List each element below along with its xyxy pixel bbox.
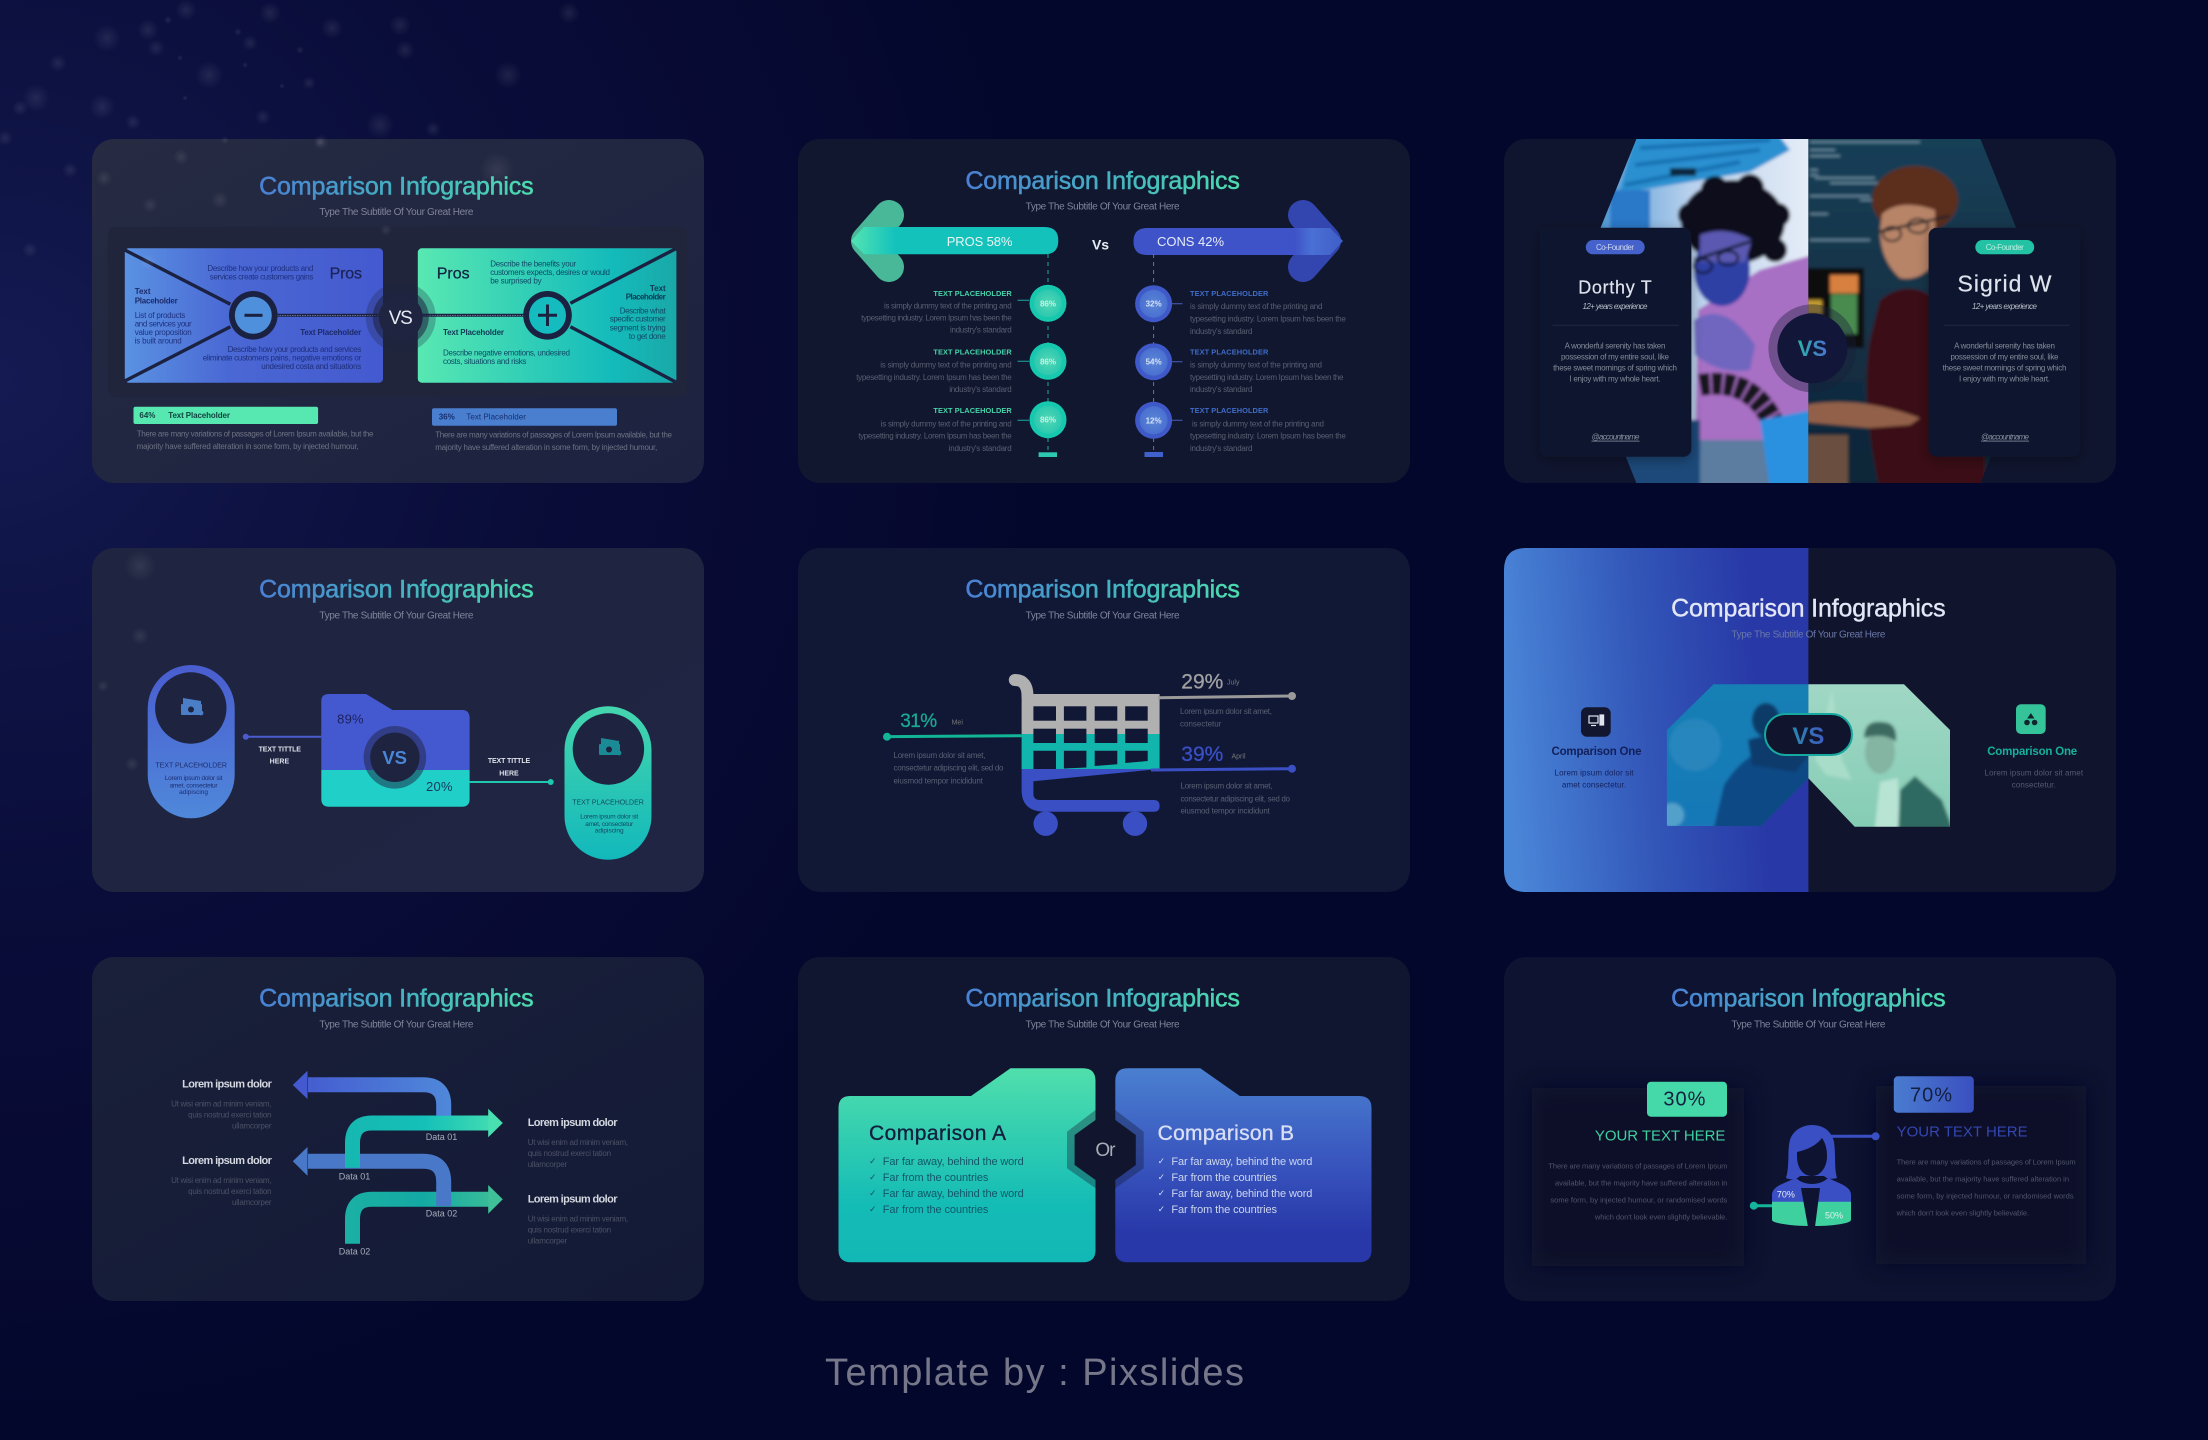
list: cons text: is simply dummy text of the printing and [1190, 302, 1322, 311]
card: blue cons: services create customers gains [210, 272, 313, 281]
text: top right [528, 1117, 628, 1169]
list: pros text: typesetting industry. Lorem Ipsum has been the [858, 432, 1012, 441]
card: green pros: specific customer [610, 315, 666, 324]
list: cons text: industry's standard [1190, 444, 1252, 453]
list: cons text: industry's standard [1190, 327, 1252, 336]
folder: comparison B: Far from the countries [1171, 1172, 1278, 1184]
timeline: pros: 86% [1040, 299, 1056, 308]
pill: right: adipiscing [595, 827, 624, 834]
card: Dorthy T: 12+ years experience [1582, 302, 1648, 311]
folder: comparison B: Far far away, behind the word [1171, 1156, 1312, 1168]
text: lower right [528, 1193, 628, 1245]
shadow cards [1532, 1086, 2086, 1266]
connector: left: HERE [270, 759, 289, 766]
text: left note [137, 430, 374, 451]
folder: comparison A: ✓ [869, 1189, 877, 1199]
icon: three nodes [2024, 713, 2037, 725]
or badge [1067, 1110, 1144, 1188]
bar: 64%: 64% [139, 411, 155, 420]
arrow labels: Data 02 [426, 1209, 457, 1219]
connector: left: TEXT TITTLE [259, 746, 301, 753]
bar: 64% [134, 407, 318, 424]
text: lower left [171, 1155, 273, 1207]
card: blue cons: List of products [135, 311, 185, 320]
connector: right [470, 758, 554, 785]
block: 70%: available, but the majority have suffered alteration in [1897, 1175, 2069, 1184]
card: green pros: to get done [629, 332, 666, 341]
arrow: blue data 01 [293, 1071, 444, 1116]
text: lower left: Lorem ipsum dolor [182, 1155, 273, 1167]
list: pros text: industry's standard [949, 385, 1012, 394]
panel: profile comparison [1504, 130, 2116, 490]
text: top right: ullamcorper [528, 1160, 568, 1169]
list: cons text: is simply dummy text of the printing and [1190, 361, 1322, 370]
arrow labels: Data 01 [426, 1132, 457, 1142]
text: left note: majority have suffered alteration in some form, by injected humour, [137, 442, 359, 451]
card: blue cons: is built around [135, 337, 182, 346]
list: pros text: TEXT PLACEHOLDER [933, 347, 1012, 356]
panel: shopping cart [798, 548, 1410, 892]
subtitle: Type The Subtitle Of Your Great Here [319, 1020, 474, 1031]
card: blue cons: Pros [330, 265, 362, 282]
panel: crossing arrows [92, 957, 704, 1301]
card: Sigrid W: these sweet mornings of spring which [1943, 364, 2066, 373]
list: pros text [856, 289, 1012, 453]
folder: comparison A [838, 1068, 1096, 1262]
callout: 29% July: consectetur [1180, 720, 1222, 729]
list: cons text: is simply dummy text of the printing and [1192, 419, 1324, 428]
card: Sigrid W: A wonderful serenity has taken [1954, 342, 2055, 351]
card: Sigrid W: 12+ years experience [1972, 302, 2038, 311]
list: pros text: industry's standard [950, 326, 1012, 335]
card: Dorthy T: I enjoy with my whole heart. [1570, 375, 1660, 384]
arrow: teal data 02 [352, 1185, 503, 1244]
card: Dorthy T: Dorthy T [1578, 278, 1652, 298]
callout: 31% Mei: consectetur adipiscing elit, sed do [894, 764, 1004, 773]
card: green pros [418, 248, 676, 383]
timeline: cons: 54% [1146, 358, 1162, 367]
card: green pros: segment is trying [610, 323, 666, 332]
folder: 20% [426, 779, 453, 794]
list: pros text: typesetting industry. Lorem Ipsum has been the [856, 373, 1012, 382]
text: top right: Ut wisi enim ad minim veniam, [528, 1138, 628, 1147]
panel: pros cons arrows [798, 139, 1410, 483]
title: Comparison Infographics [259, 172, 534, 200]
arrow: teal data 01 [352, 1109, 503, 1168]
icon: plus circle [523, 291, 572, 340]
icon: person: 70% [1777, 1189, 1795, 1199]
arrow: pros: PROS 58% [947, 234, 1013, 249]
pill: left: TEXT PLACEHOLDER [155, 763, 227, 770]
block: 30%: available, but the majority have suffered alteration in [1555, 1179, 1727, 1188]
list: pros text: industry's standard [949, 444, 1012, 453]
list: pros text: TEXT PLACEHOLDER [933, 406, 1012, 415]
panel: folder vs pills [92, 548, 704, 892]
icon: person [1750, 1125, 1880, 1227]
card: blue cons: and services your [135, 319, 192, 328]
folder: comparison A: ✓ [869, 1173, 877, 1183]
or badge: Or [1095, 1140, 1116, 1161]
callout: 39% April [1151, 743, 1296, 816]
text: right note: majority have suffered alteration in some form, by injected humour, [435, 443, 657, 452]
block: right comparison: consectetur. [2012, 781, 2056, 790]
vs badge: VS [1798, 336, 1827, 361]
card: Dorthy T: possession of my entire soul, like [1561, 353, 1670, 362]
text: right note [435, 431, 673, 452]
photo: right [1808, 684, 1950, 827]
list: cons text: typesetting industry. Lorem Ipsum has been the [1190, 432, 1346, 441]
list: pros text: TEXT PLACEHOLDER [933, 289, 1012, 298]
timeline: cons: 12% [1146, 416, 1162, 425]
folder: VS [382, 747, 407, 768]
pill: left [148, 665, 235, 818]
list: cons text [1190, 289, 1346, 453]
vs badge [1768, 304, 1856, 392]
list: cons text: typesetting industry. Lorem Ipsum has been the [1190, 373, 1344, 382]
callout: 39% April: Lorem ipsum dolor sit amet, [1180, 782, 1272, 791]
icon: minus circle [229, 291, 278, 340]
timeline: cons: 32% [1146, 300, 1162, 309]
arrow: blue data 02 [293, 1147, 444, 1206]
text: lower left: ullamcorper [232, 1198, 272, 1207]
card: blue cons: Describe how your products and [207, 264, 313, 273]
subtitle: Type The Subtitle Of Your Great Here [1026, 1020, 1180, 1031]
icon: camera and bill [599, 738, 621, 755]
text: right note: There are many variations of passages of Lorem Ipsum available, but the [435, 431, 673, 440]
text: lower right: ullamcorper [528, 1236, 568, 1245]
card: blue cons: undesired costa and situations [261, 362, 361, 371]
block: 70%: some form, by injected humour, or randomised words [1897, 1192, 2074, 1201]
list: cons text: TEXT PLACEHOLDER [1190, 289, 1269, 298]
block: 70%: which don't look even slightly believable. [1896, 1208, 2029, 1217]
card: blue cons: Placeholder [135, 297, 178, 306]
subtitle: Type The Subtitle Of Your Great Here [319, 611, 474, 622]
pill: right: TEXT PLACEHOLDER [572, 800, 644, 807]
panel: person stats [1504, 957, 2116, 1301]
callout: 39% April: 39% [1181, 743, 1223, 766]
timeline: pros: 86% [1040, 416, 1056, 425]
timeline: pros [1018, 254, 1066, 457]
particles [0, 0, 580, 771]
connector: left [243, 734, 321, 766]
block: right comparison: Comparison One [1987, 746, 2077, 758]
block: 70%: There are many variations of passages of Lorem Ipsum [1897, 1158, 2076, 1167]
title: Comparison Infographics [259, 576, 534, 604]
subtitle: Type The Subtitle Of Your Great Here [1731, 630, 1886, 641]
subtitle: Type The Subtitle Of Your Great Here [319, 207, 474, 218]
card: blue cons: eliminate customers pains, negative emotions or [203, 353, 362, 362]
icon: shopping cart [1015, 680, 1160, 836]
title: Comparison Infographics [1671, 595, 1946, 623]
card: green pros: costs, situations and risks [443, 357, 526, 366]
text: lower left: Ut wisi enim ad minim veniam, [171, 1176, 272, 1185]
folder [321, 694, 470, 807]
text: top right: quis nostrud exerci tation [528, 1149, 611, 1158]
connector: right: TEXT TITTLE [488, 758, 530, 765]
text: lower right: Lorem ipsum dolor [528, 1193, 618, 1205]
block: 30% [1548, 1082, 1728, 1221]
folder: comparison B: Far far away, behind the word [1171, 1188, 1312, 1200]
list: pros text: is simply dummy text of the printing and [881, 419, 1012, 428]
card: green pros: Describe the benefits your [490, 260, 577, 269]
callout: 31% Mei: 31% [900, 711, 937, 732]
text: top left [171, 1079, 273, 1131]
card: Dorthy T: @accountname [1592, 433, 1640, 442]
folder: comparison B: ✓ [1158, 1173, 1165, 1183]
title: Comparison Infographics [965, 576, 1240, 604]
subtitle: Type The Subtitle Of Your Great Here [1731, 1020, 1886, 1031]
bar: 64%: Text Placeholder [168, 411, 230, 420]
card: green pros: Text [650, 284, 666, 293]
callout: 29% July: 29% [1181, 670, 1223, 693]
block: left comparison [1552, 707, 1642, 790]
icon: computer [1589, 715, 1604, 726]
panel: comparison folders [798, 957, 1410, 1301]
callout: 31% Mei: Mei [952, 719, 963, 726]
callout: 29% July: Lorem ipsum dolor sit amet, [1180, 707, 1272, 716]
card: green pros: be surprised by [490, 276, 542, 285]
block: 70%: YOUR TEXT HERE [1897, 1124, 2028, 1141]
folder: comparison B: ✓ [1158, 1157, 1165, 1167]
folder: comparison B: Comparison B [1158, 1122, 1294, 1145]
connector: right: HERE [499, 770, 519, 777]
card: green pros: Text Placeholder [443, 328, 504, 337]
block: right comparison [1985, 704, 2084, 790]
folder: comparison A: Far far away, behind the word [883, 1188, 1024, 1200]
subtitle: Type The Subtitle Of Your Great Here [1026, 202, 1180, 213]
card: blue cons: Text Placeholder [300, 328, 361, 337]
text: top left: ullamcorper [232, 1122, 272, 1131]
folder: comparison B: ✓ [1158, 1189, 1165, 1199]
folder: comparison A: ✓ [869, 1157, 877, 1167]
card: green pros: Describe what [620, 306, 666, 315]
card: blue cons: Describe how your products and services [228, 345, 361, 354]
folder: comparison A: Far from the countries [883, 1204, 989, 1216]
folder: 89% [337, 711, 364, 726]
block: right comparison: Lorem ipsum dolor sit amet [1985, 769, 2084, 778]
card: Sigrid W: @accountname [1981, 433, 2030, 442]
callout: 39% April: eiusmod tempor incididunt [1180, 807, 1271, 816]
card: blue cons [125, 248, 383, 383]
card: Sigrid W: I enjoy with my whole heart. [1959, 375, 2050, 384]
text: lower right: quis nostrud exerci tation [528, 1225, 611, 1234]
timeline: cons [1135, 254, 1182, 457]
card: Dorthy T [1540, 228, 1691, 457]
bar: 36% [432, 408, 617, 426]
text: top left: Ut wisi enim ad minim veniam, [171, 1100, 272, 1109]
bar: 36%: 36% [439, 413, 455, 422]
list: cons text: industry's standard [1190, 385, 1252, 394]
bar: 36%: Text Placeholder [466, 413, 526, 422]
panel: pros cons envelope [92, 139, 704, 483]
title: Comparison Infographics [965, 985, 1240, 1013]
card: green pros: Pros [437, 265, 470, 282]
folder: comparison B: ✓ [1158, 1205, 1165, 1215]
folder: comparison A: Comparison A [869, 1122, 1006, 1145]
title: Comparison Infographics [259, 985, 534, 1013]
list: pros text: is simply dummy text of the printing and [884, 302, 1012, 311]
block: left comparison: Lorem ipsum dolor sit [1554, 769, 1634, 778]
card: Dorthy T: A wonderful serenity has taken [1565, 342, 1665, 351]
vs badge [1765, 714, 1852, 755]
text: top right: Lorem ipsum dolor [528, 1117, 618, 1129]
callout: 31% Mei: eiusmod tempor incididunt [894, 776, 984, 785]
pill: right: amet, consectetur [585, 821, 634, 828]
arrow labels: Data 02 [339, 1247, 370, 1257]
callout: 29% July [1158, 670, 1296, 729]
text: top left: Lorem ipsum dolor [182, 1079, 273, 1091]
photo: left [1666, 684, 1808, 826]
callout: 39% April: consectetur adipiscing elit, sed do [1180, 794, 1291, 803]
timeline: pros: 86% [1040, 357, 1056, 366]
block: 30%: some form, by injected humour, or randomised words [1550, 1195, 1728, 1204]
pill: right [564, 706, 652, 860]
card: Sigrid W: Co-Founder [1986, 243, 2024, 252]
arrow: cons: CONS 42% [1157, 234, 1224, 249]
photo: right person [1808, 139, 2016, 483]
callout: 31% Mei: Lorem ipsum dolor sit amet, [894, 751, 986, 760]
icon: person: 50% [1825, 1210, 1843, 1220]
block: 70%: 70% [1910, 1085, 1952, 1107]
subtitle: Type The Subtitle Of Your Great Here [1026, 611, 1180, 622]
footer credit: Template by : Pixslides [825, 1352, 1244, 1394]
panel: split photo comparison [1504, 548, 2116, 892]
callout: 31% Mei [883, 711, 1022, 785]
card: Sigrid W: possession of my entire soul, like [1950, 353, 2059, 362]
card: green pros: customers expects, desires or would [490, 268, 610, 277]
block: 30%: which don't look even slightly believable. [1594, 1212, 1727, 1221]
pill: left: amet, consectetur [170, 782, 218, 789]
arrow: cons [1134, 215, 1343, 267]
block: left comparison: amet consectetur. [1562, 781, 1626, 790]
callout: 39% April: April [1232, 754, 1246, 761]
title: Comparison Infographics [965, 167, 1240, 195]
label: vs: Vs [1092, 236, 1109, 252]
icon: camera and bill [181, 698, 203, 715]
card: green pros: Describe negative emotions, undesired [443, 349, 570, 358]
connector lines [277, 314, 524, 317]
list: pros text: is simply dummy text of the printing and [880, 361, 1012, 370]
vs badge: VS [1792, 723, 1824, 750]
callout: 29% July: July [1227, 680, 1240, 687]
block: left comparison: Comparison One [1552, 746, 1642, 758]
folder: comparison A: Far far away, behind the word [883, 1156, 1024, 1168]
folder: comparison B: Far from the countries [1171, 1204, 1278, 1216]
card: Sigrid W: Sigrid W [1958, 271, 2052, 297]
block: 30%: There are many variations of passages of Lorem Ipsum [1548, 1162, 1727, 1171]
vs badge: VS [389, 308, 413, 329]
pill: left: Lorem ipsum dolor sit [165, 775, 223, 782]
block: 70% [1894, 1076, 2076, 1217]
text: lower right: Ut wisi enim ad minim veniam, [528, 1214, 628, 1223]
list: cons text: typesetting industry. Lorem Ipsum has been the [1190, 315, 1346, 324]
card: Sigrid W [1929, 228, 2080, 457]
folder: comparison A: Far from the countries [883, 1172, 989, 1184]
pill: right: Lorem ipsum dolor sit [580, 814, 638, 821]
card: blue cons: Text [135, 287, 151, 296]
card: blue cons: value proposition [135, 328, 192, 337]
text: top left: quis nostrud exerci tation [188, 1111, 272, 1120]
folder: comparison B [1115, 1068, 1372, 1262]
title: Comparison Infographics [1671, 985, 1946, 1013]
block: 30%: 30% [1663, 1089, 1706, 1111]
vs badge [366, 282, 436, 352]
list: cons text: TEXT PLACEHOLDER [1190, 347, 1269, 356]
folder: comparison A: ✓ [869, 1205, 877, 1215]
arrow labels [339, 1132, 457, 1257]
photo: left person [1600, 139, 1808, 483]
card: green pros: Placeholder [626, 293, 666, 302]
list: pros text: typesetting industry. Lorem Ipsum has been the [861, 314, 1012, 323]
arrow: pros [851, 215, 1058, 267]
text: lower left: quis nostrud exerci tation [188, 1187, 272, 1196]
list: cons text: TEXT PLACEHOLDER [1190, 406, 1269, 415]
inner tray [108, 227, 687, 397]
block: 30%: YOUR TEXT HERE [1595, 1128, 1725, 1145]
card: Dorthy T: these sweet mornings of spring which [1553, 364, 1677, 373]
card: Dorthy T: Co-Founder [1596, 243, 1634, 252]
arrow labels: Data 01 [339, 1172, 370, 1182]
pill: left: adipiscing [179, 789, 208, 796]
text: left note: There are many variations of passages of Lorem Ipsum available, but the [137, 430, 374, 439]
